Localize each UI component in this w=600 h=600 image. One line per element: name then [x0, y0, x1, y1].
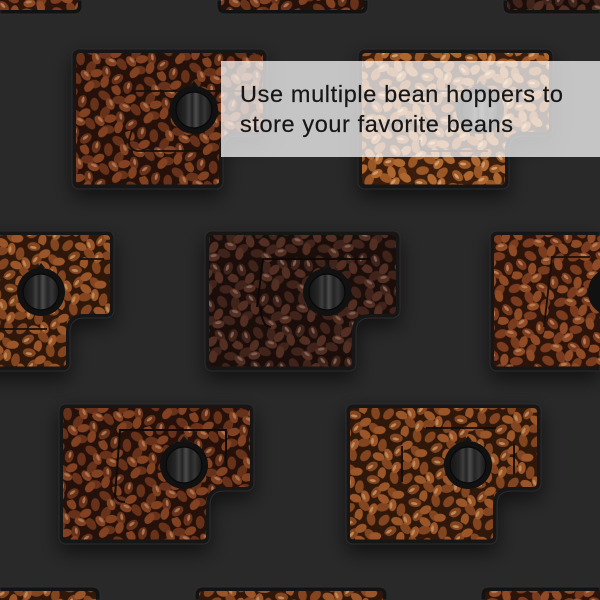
hopper: bottom row left	[59, 404, 254, 544]
headline text	[240, 81, 563, 137]
hopper: middle row left	[0, 231, 114, 371]
hopper: top row right	[503, 0, 600, 14]
hopper: top row centre	[217, 0, 368, 14]
hopper: lower edge right	[481, 587, 600, 600]
headline text: store your favorite beans	[240, 111, 513, 137]
hopper: light roast behind banner	[358, 49, 553, 189]
hopper: top row left	[0, 0, 82, 14]
hopper: lower edge left	[0, 587, 100, 600]
hopper: lower edge centre	[195, 587, 387, 600]
hopper: reddish medium roast	[72, 49, 267, 189]
hopper: middle row right	[490, 231, 600, 371]
headline text: Use multiple bean hoppers to	[240, 81, 563, 107]
hopper: bottom row right	[346, 404, 541, 544]
hopper: middle row centre, dark roast	[205, 231, 400, 371]
translucent banner	[221, 61, 600, 157]
